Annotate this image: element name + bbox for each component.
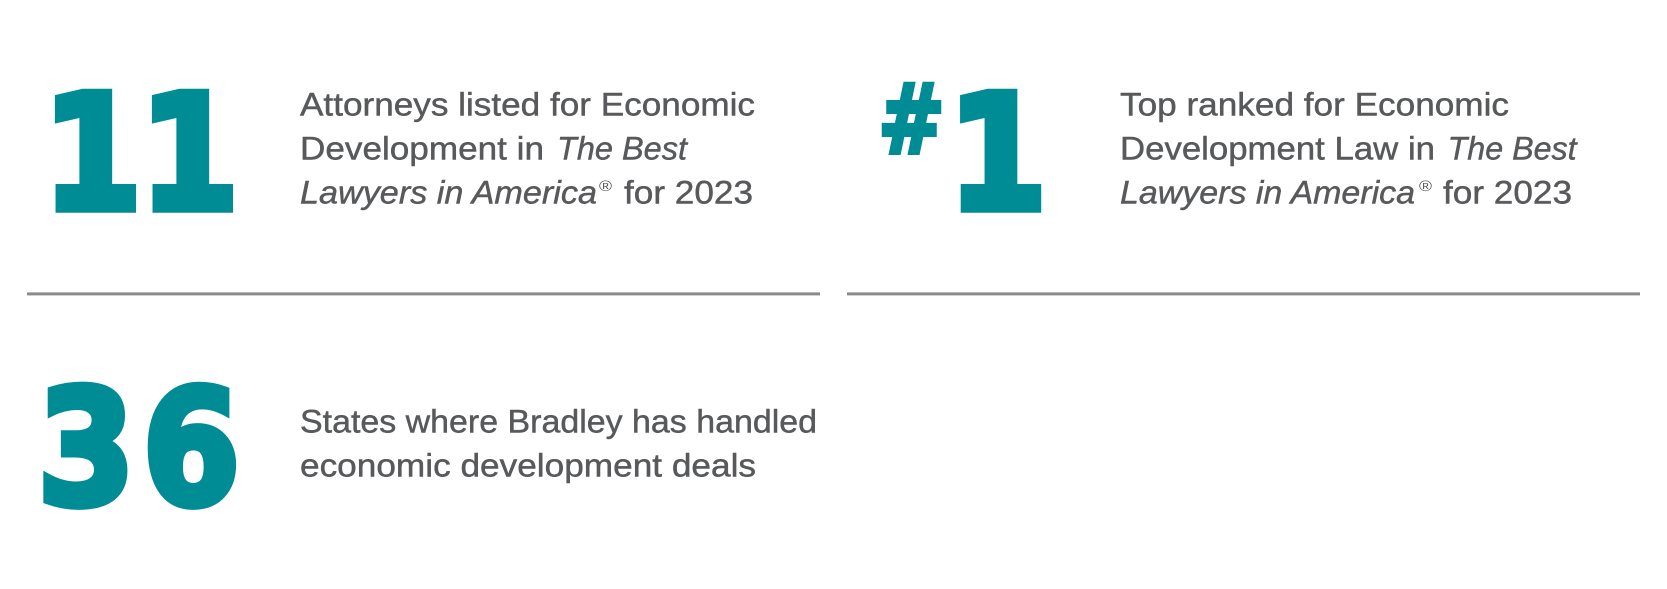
number: #1: # (878, 64, 945, 176)
divider: left (27, 292, 820, 295)
text: attorneys description: for 2023 (624, 174, 753, 210)
text: attorneys description (300, 86, 755, 210)
text: top ranked description: Top ranked for Economic (1120, 86, 1509, 122)
text: states description: economic development deals (300, 448, 756, 484)
text: attorneys description: Attorneys listed for Economic (300, 86, 755, 122)
text: attorneys description: The Best (557, 130, 688, 166)
text: attorneys description: ® (599, 178, 612, 195)
number: #1: 1 (947, 61, 1047, 246)
text: attorneys description: Development in (300, 130, 544, 166)
text: states description: States where Bradley has handled (300, 404, 817, 440)
number: #1 (878, 61, 1047, 246)
text: top ranked description: for 2023 (1443, 174, 1572, 210)
panel: states stat (37, 357, 817, 542)
text: attorneys description: Lawyers in America (300, 174, 597, 210)
number: 11: 11 (42, 61, 239, 246)
panel: attorneys listed stat (42, 61, 755, 246)
text: top ranked description: ® (1419, 178, 1432, 195)
divider: right (847, 292, 1640, 295)
text: top ranked description: Lawyers in America (1120, 174, 1415, 210)
text: states description (300, 404, 817, 484)
text: top ranked description (1120, 86, 1578, 210)
number: 36: 36 (37, 357, 240, 542)
text: top ranked description: The Best (1448, 130, 1578, 166)
panel: top ranked stat (878, 61, 1578, 246)
text: top ranked description: Development Law in (1120, 130, 1435, 166)
